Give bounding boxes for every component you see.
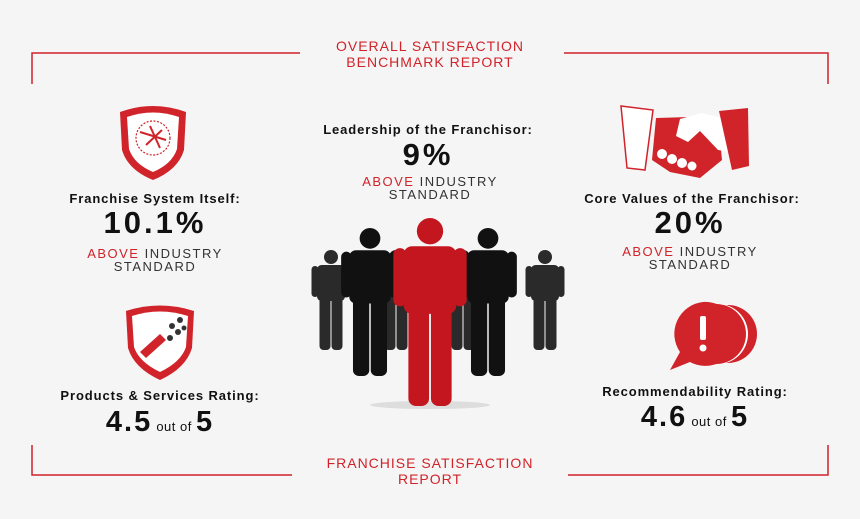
text: recommendability (602, 384, 788, 433)
text: products (60, 388, 260, 438)
bottom title: REPORT (398, 471, 462, 487)
bottom title (327, 455, 533, 487)
text: core values: ABOVE INDUSTRY (622, 244, 758, 259)
text: franchise system: 10.1% (104, 205, 206, 240)
text: products: 4.5 out of 5 (106, 406, 214, 438)
people group (312, 218, 564, 409)
bottom title: FRANCHISE SATISFACTION (327, 455, 533, 471)
text: core values: 20% (654, 205, 726, 240)
text: franchise system (69, 191, 241, 274)
text: recommendability: 4.6 out of 5 (641, 401, 749, 433)
icon: shield spray (126, 306, 194, 380)
text: core values: STANDARD (649, 257, 731, 272)
text: leadership: 9% (403, 137, 453, 172)
text: franchise system: Franchise System Itself: (69, 191, 241, 206)
text: franchise system: ABOVE INDUSTRY (87, 246, 223, 261)
text: recommendability: Recommendability Rating: (602, 384, 788, 399)
title: BENCHMARK REPORT (346, 54, 514, 70)
text: leadership (323, 122, 533, 202)
text: franchise system: STANDARD (114, 259, 196, 274)
icon: alert bubble (670, 302, 757, 370)
text: products: Products & Services Rating: (60, 388, 260, 403)
text: leadership: Leadership of the Franchisor: (323, 122, 533, 137)
icon: shield mosquito (120, 106, 186, 180)
text: core values (584, 191, 800, 272)
title (336, 38, 524, 70)
icon: handshake (621, 106, 749, 178)
title: OVERALL SATISFACTION (336, 38, 524, 54)
text: leadership: ABOVE INDUSTRY (362, 174, 498, 189)
text: core values: Core Values of the Franchisor: (584, 191, 800, 206)
text: leadership: STANDARD (389, 187, 471, 202)
frame top (32, 53, 828, 475)
